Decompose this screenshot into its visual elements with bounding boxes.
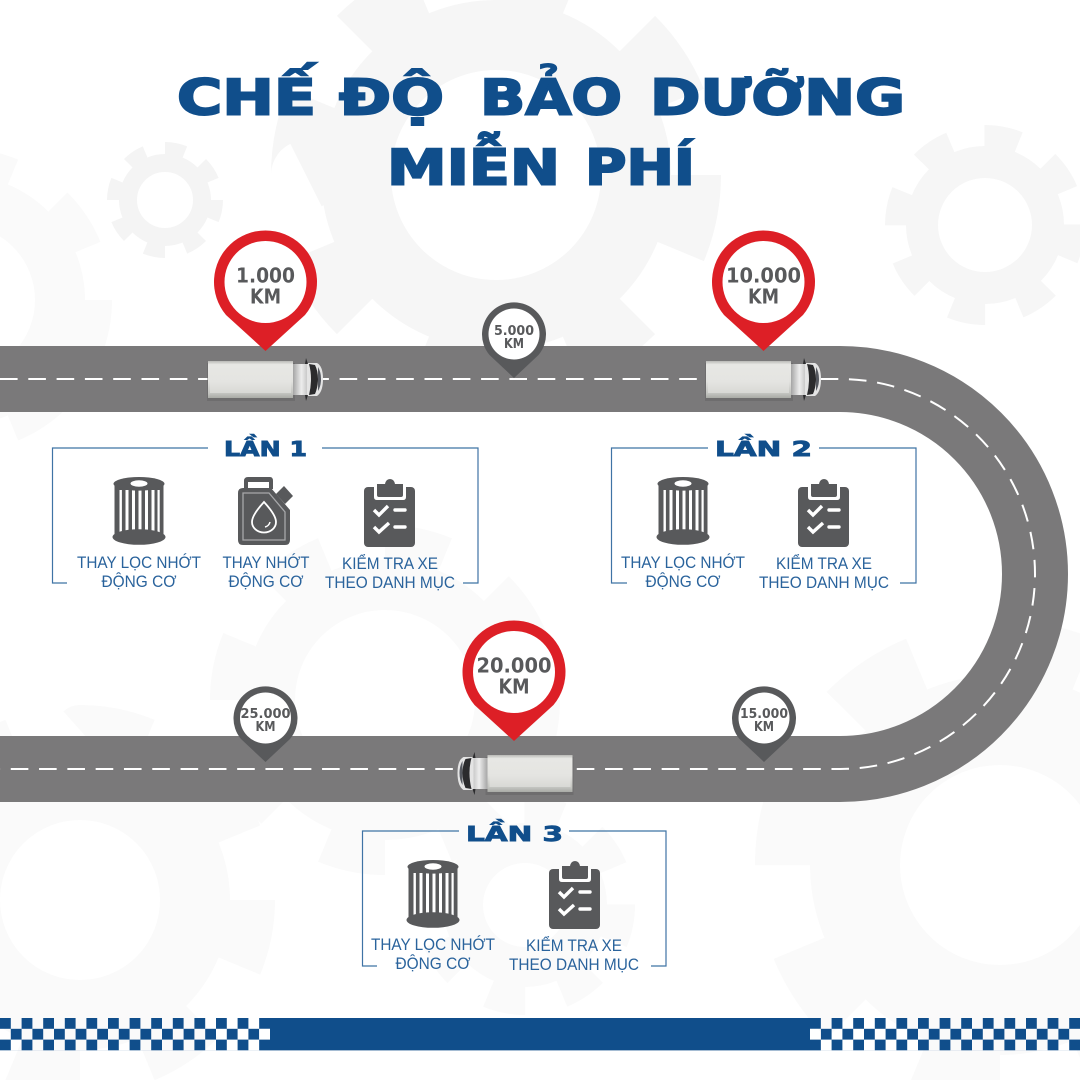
pin: 5.000 km: KM [504, 336, 524, 352]
label: thay nhớt: ĐỘNG CƠ [228, 572, 304, 591]
title: CHẾ [177, 62, 317, 126]
label: kiểm tra xe: THEO DANH MỤC [325, 574, 455, 592]
label: kiểm tra xe [509, 936, 639, 974]
label: thay nhớt: THAY NHỚT [222, 553, 310, 572]
icon: oil filter [406, 860, 460, 928]
pin: 1.000 km: 1.000 [236, 264, 295, 288]
label: kiểm tra xe: KIỂM TRA XE [342, 554, 438, 573]
label: kiểm tra xe: KIỂM TRA XE [526, 936, 622, 955]
label: thay lọc nhớt [621, 553, 745, 591]
pin: 10.000 km: 10.000 [726, 264, 801, 288]
truck 1 [207, 358, 323, 401]
pin: 1.000 km [214, 230, 317, 351]
pin: 20.000 km: 20.000 [476, 654, 552, 678]
label: kiểm tra xe: THEO DANH MỤC [509, 956, 639, 974]
label: kiểm tra xe: THEO DANH MỤC [759, 574, 889, 592]
heading: lần 2: LẦN 2 [715, 433, 812, 461]
pin: 5.000 km [482, 302, 546, 378]
pin: 5.000 km: 5.000 [494, 323, 534, 339]
panel: lần 3 [362, 818, 666, 974]
title: PHÍ [585, 138, 695, 196]
title: DƯỠNG [650, 68, 905, 126]
pin: 20.000 km [462, 620, 566, 741]
icon: oil filter [656, 477, 710, 545]
title: MIỄN [387, 130, 560, 196]
label: thay lọc nhớt [371, 935, 495, 973]
label: kiểm tra xe [325, 554, 455, 592]
pin: 25.000 km [234, 686, 297, 762]
panel: lần 1 [52, 433, 478, 592]
pin: 15.000 km [732, 686, 796, 762]
label: thay lọc nhớt: THAY LỌC NHỚT [77, 553, 201, 572]
label: thay lọc nhớt: ĐỘNG CƠ [646, 572, 720, 591]
label: thay nhớt [222, 553, 310, 591]
panel: lần 2 [612, 433, 916, 592]
pin: 1.000 km: KM [250, 284, 281, 308]
icon: oil filter [112, 477, 166, 545]
icon: checklist [798, 479, 849, 547]
label: thay lọc nhớt: ĐỘNG CƠ [396, 954, 470, 973]
label: thay lọc nhớt: THAY LỌC NHỚT [371, 935, 495, 954]
icon: checklist [549, 861, 600, 929]
pin: 25.000 km: KM [256, 719, 276, 735]
heading: lần 3: LẦN 3 [466, 818, 563, 846]
checkered footer band [0, 1018, 1080, 1050]
title [177, 62, 905, 196]
label: thay lọc nhớt [77, 553, 201, 591]
label: kiểm tra xe: KIỂM TRA XE [776, 554, 872, 573]
title: BẢO [480, 62, 622, 126]
pin: 15.000 km: 15.000 [740, 706, 788, 722]
pin: 15.000 km: KM [754, 719, 774, 735]
pin: 10.000 km: KM [748, 284, 779, 308]
label: thay lọc nhớt: ĐỘNG CƠ [102, 572, 176, 591]
heading: lần 1: LẦN 1 [224, 433, 307, 461]
title: ĐỘ [339, 68, 444, 126]
pin: 25.000 km: 25.000 [240, 706, 290, 722]
icon: checklist [364, 479, 415, 547]
truck 2 [705, 358, 821, 401]
label: kiểm tra xe [759, 554, 889, 592]
label: thay lọc nhớt: THAY LỌC NHỚT [621, 553, 745, 572]
icon: oil can [238, 477, 293, 545]
pin: 20.000 km: KM [498, 674, 530, 698]
truck 3 [458, 752, 574, 795]
road [0, 379, 1035, 769]
pin: 10.000 km [712, 230, 815, 351]
